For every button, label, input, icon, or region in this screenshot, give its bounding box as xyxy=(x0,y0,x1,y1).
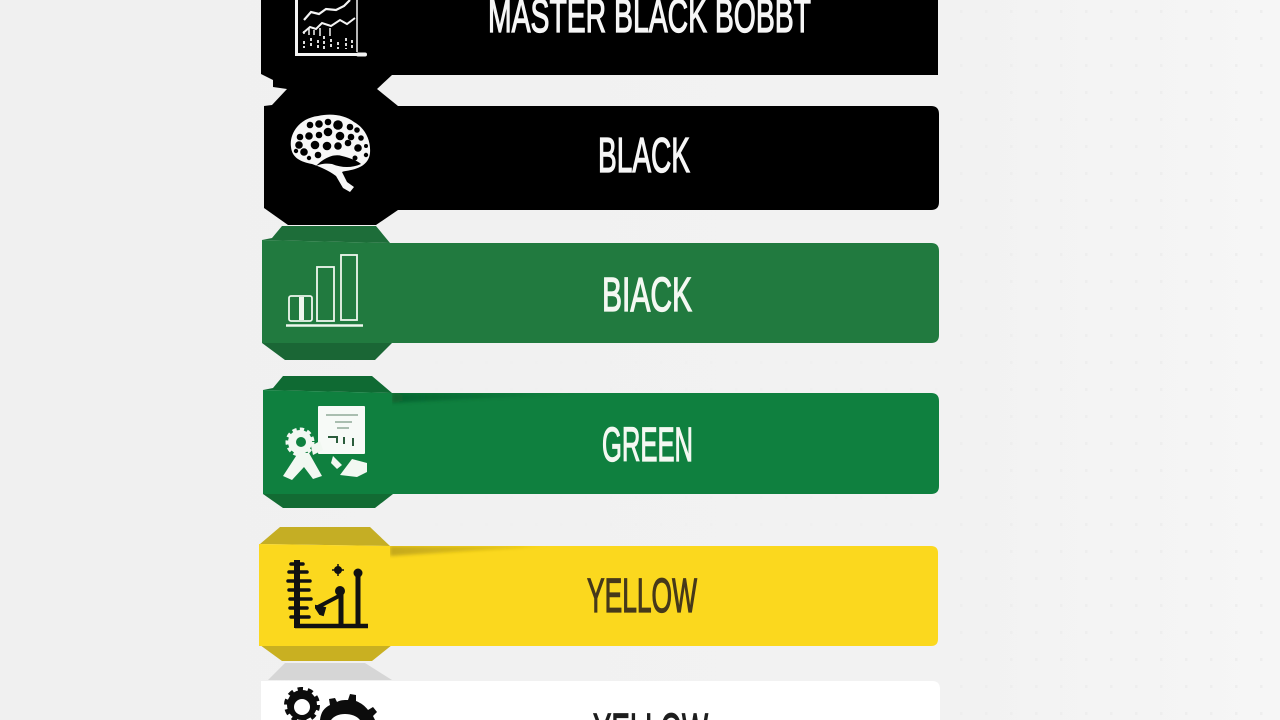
panel: black belt xyxy=(264,89,939,225)
label: yellow: YELLOW xyxy=(587,570,697,623)
icon: gear and document xyxy=(283,406,367,480)
icon: line chart xyxy=(296,0,365,54)
icon: gears xyxy=(287,690,377,720)
panel: green belt xyxy=(263,376,939,508)
label: black: BLACK xyxy=(598,129,690,183)
label: black on green: BIACK xyxy=(602,269,692,322)
panel: yellow belt xyxy=(259,527,938,680)
icon: brain xyxy=(291,115,370,192)
icon: tower and worker xyxy=(288,560,368,628)
panel: white belt xyxy=(261,681,940,720)
panel: master black belt xyxy=(261,0,938,89)
panel: green-black belt xyxy=(262,226,939,360)
shadow under yellow tab xyxy=(268,663,392,680)
icon: bar chart xyxy=(286,255,363,326)
label: green: GREEN xyxy=(602,419,693,472)
